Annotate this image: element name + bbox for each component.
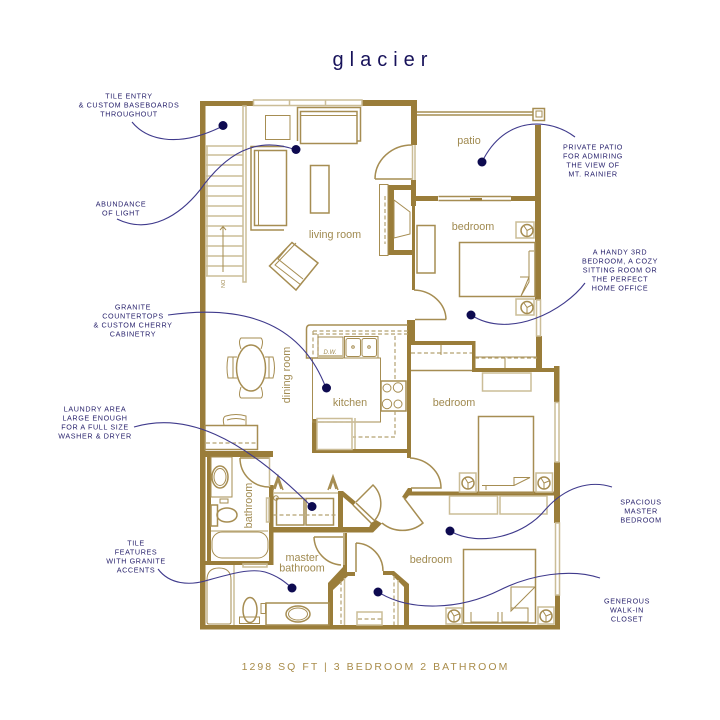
bedroom two furniture: [460, 373, 552, 493]
callout: granite countertops: CABINETRY: [110, 330, 156, 338]
callout: private patio: MT. RAINIER: [568, 170, 618, 178]
kitchen fixtures: D.W.: [323, 350, 337, 356]
dining set: [205, 338, 274, 450]
hall bathroom fixtures: [211, 457, 268, 567]
callout: tile features: ACCENTS: [117, 566, 155, 574]
callout: tile entry: & CUSTOM BASEBOARDS: [79, 100, 179, 110]
room labels: master: [286, 552, 319, 564]
room labels: kitchen: [333, 397, 367, 409]
callout: tile features: FEATURES: [115, 548, 157, 556]
callout: laundry area: LAUNDRY AREA: [64, 404, 126, 414]
callout: walk-in closet: [374, 573, 650, 624]
room labels: bedroom: [452, 221, 494, 233]
room labels: patio: [457, 135, 481, 147]
callout: granite countertops: & CUSTOM CHERRY: [93, 320, 173, 330]
callout: handy third bedroom: A HANDY 3RD: [593, 248, 647, 256]
room labels: bedroom: [433, 397, 475, 409]
callout: spacious master bedroom: BEDROOM: [620, 516, 662, 524]
callout: laundry area: LARGE ENOUGH: [62, 414, 128, 422]
windows: [254, 100, 560, 595]
callout: walk-in closet: WALK-IN: [610, 606, 644, 614]
callout: abundance of light: ABUNDANCE: [96, 200, 146, 208]
callout: tile entry: [79, 92, 228, 140]
master bathroom fixtures: [207, 565, 344, 625]
callout: private patio: [478, 124, 623, 178]
stairs: DN: [219, 280, 225, 288]
living room furniture: [251, 108, 360, 290]
callout: walk-in closet: GENEROUS: [604, 596, 650, 606]
closet shelving: [357, 345, 537, 625]
callout: granite countertops: GRANITE: [115, 302, 151, 312]
title: glacier: [333, 49, 433, 71]
fireplace: [380, 184, 412, 256]
callout: abundance of light: [96, 145, 300, 225]
room labels: bathroom: [279, 562, 325, 574]
callout: handy third bedroom: THE PERFECT: [592, 274, 648, 284]
callout: walk-in closet: CLOSET: [611, 614, 643, 624]
callout: private patio: THE VIEW OF: [566, 160, 620, 170]
bedroom one furniture: [417, 222, 535, 315]
callout: private patio: FOR ADMIRING: [563, 152, 623, 160]
walls: [200, 100, 560, 630]
room labels: bedroom: [410, 554, 452, 566]
doors: [240, 145, 446, 572]
callout: abundance of light: OF LIGHT: [102, 208, 140, 218]
room labels: bathroom: [243, 483, 255, 528]
laundry area: [266, 476, 338, 525]
callout: tile entry: THROUGHOUT: [100, 110, 158, 118]
master bedroom furniture: [446, 496, 554, 624]
room labels: living room: [309, 229, 361, 241]
room labels: [243, 135, 494, 574]
callout: tile features: WITH GRANITE: [106, 556, 166, 566]
room labels: dining room: [281, 347, 293, 403]
callout: tile features: [106, 538, 296, 592]
callout: handy third bedroom: [466, 248, 658, 324]
callout: granite countertops: COUNTERTOPS: [102, 312, 164, 320]
callout: handy third bedroom: SITTING ROOM OR: [583, 266, 657, 274]
callout: laundry area: [58, 404, 316, 511]
callout: handy third bedroom: HOME OFFICE: [592, 284, 648, 292]
callout: tile features: TILE: [127, 538, 145, 548]
callout: laundry area: FOR A FULL SIZE: [61, 422, 129, 432]
callout: spacious master bedroom: [446, 484, 662, 539]
kitchen fixtures: [306, 325, 408, 450]
callout: laundry area: WASHER & DRYER: [58, 432, 132, 440]
patio rail: [417, 108, 544, 120]
callout: handy third bedroom: BEDROOM, A COZY: [582, 256, 658, 266]
callout: granite countertops: [93, 302, 331, 392]
callout: tile entry: TILE ENTRY: [105, 92, 153, 100]
floor plan: [200, 100, 560, 630]
callout: spacious master bedroom: SPACIOUS: [620, 498, 662, 506]
callout: private patio: PRIVATE PATIO: [563, 142, 623, 152]
callout: spacious master bedroom: MASTER: [624, 506, 658, 516]
stairs: [206, 106, 246, 288]
footer stats: 1298 SQ FT | 3 BEDROOM 2 BATHROOM: [242, 661, 509, 673]
